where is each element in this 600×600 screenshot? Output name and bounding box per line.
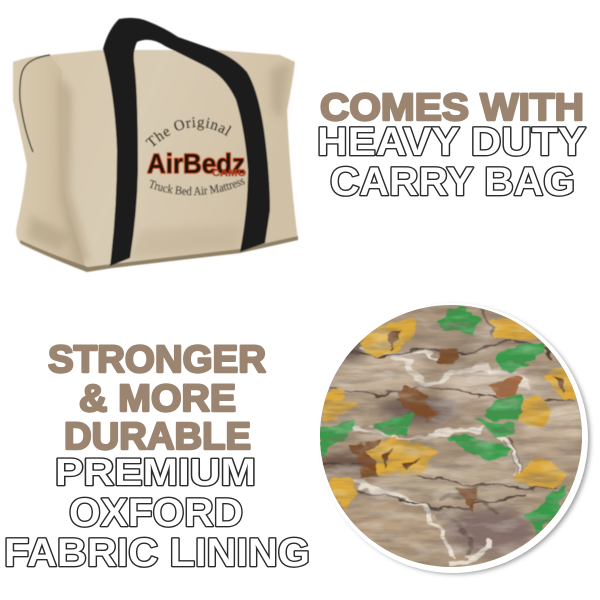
fabric fold shading — [28, 62, 290, 262]
dark creases — [320, 310, 575, 550]
camo fabric — [315, 300, 590, 575]
handles and straps — [103, 18, 270, 266]
outline line: PREMIUM: PREMIUM — [55, 452, 256, 494]
outline line: OXFORD: OXFORD — [69, 491, 243, 535]
leaf shadows — [383, 330, 565, 470]
outline line: FABRIC LINING: FABRIC LINING — [4, 531, 310, 575]
logo name: AirBedz: AirBedz — [147, 148, 245, 179]
white ring — [318, 303, 588, 573]
fabric swatch circle — [315, 300, 590, 575]
outline line: HEAVY DUTY: HEAVY DUTY — [317, 120, 586, 164]
yellow leaves — [322, 318, 577, 508]
outline line: CARRY BAG: CARRY BAG — [330, 160, 575, 204]
green leaves — [320, 312, 565, 532]
circle shadow — [322, 306, 590, 574]
bag bottom shadow — [20, 236, 298, 272]
heading: comes with heavy duty carry bag — [317, 87, 586, 204]
carry bag photo — [12, 17, 299, 273]
logo tagline: Truck Bed Air Mattress: Truck Bed Air Mattress — [149, 178, 246, 196]
heading line: STRONGER: STRONGER — [48, 339, 266, 381]
fabric texture: light streaks — [320, 308, 582, 566]
logo tagline: The Original: The Original — [144, 116, 232, 148]
brown patches — [350, 345, 520, 510]
heading: stronger and more durable, premium oxford fabric lining — [4, 339, 310, 575]
logo sub: CAMO: CAMO — [212, 168, 246, 178]
light ridges — [352, 346, 531, 567]
zipper — [20, 55, 50, 152]
bag side panel — [13, 55, 87, 272]
heading line: DURABLE: DURABLE — [64, 416, 251, 458]
heading line: COMES WITH: COMES WITH — [320, 87, 584, 129]
bag logo — [144, 116, 246, 196]
bag body — [13, 50, 298, 272]
heading line: & MORE: & MORE — [79, 378, 236, 420]
fabric texture: dark wrinkles — [320, 307, 582, 567]
